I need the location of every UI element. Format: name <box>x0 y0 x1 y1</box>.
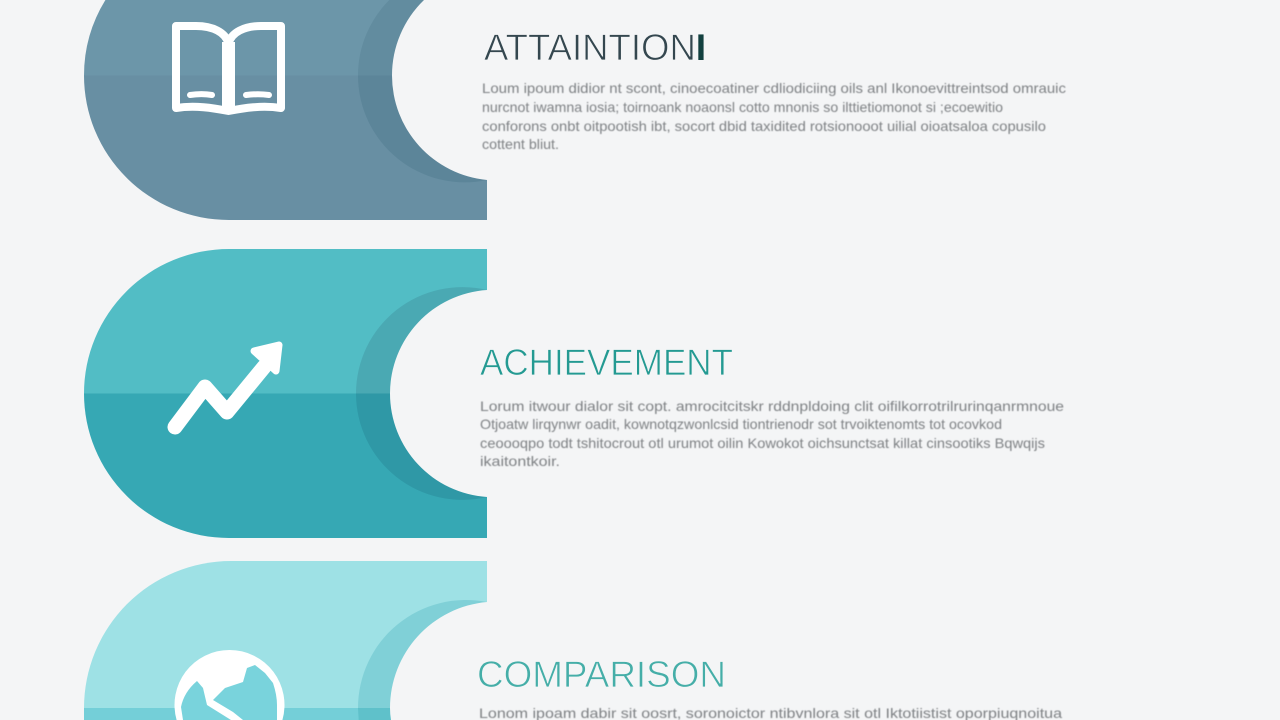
text block: attention: conforons onbt oitpootish ibt, socort dbid taxidited rotsionooot uilial oioatsaloa copusilo <box>482 118 1046 134</box>
icon: open book <box>176 26 281 111</box>
text block: attention: cottent bliut. <box>482 136 559 152</box>
text block: attention <box>482 80 1066 152</box>
tab shape: attention <box>84 0 487 220</box>
icon: rising arrow <box>175 345 279 427</box>
tab shape: achievement <box>84 249 487 538</box>
heading: achievement: ACHIEVEMENT <box>480 342 733 383</box>
icon: globe <box>174 650 284 720</box>
text block: achievement <box>480 398 1064 469</box>
tab shape: comparison <box>84 561 487 720</box>
heading: attention: ATTAINTIONI <box>484 27 706 68</box>
panel: achievement <box>84 249 1064 538</box>
panel: comparison <box>84 561 1062 720</box>
text block: achievement: Otjoatw lirqynwr oadit, kownotqzwonlcsid tiontrienodr sot trvoiktenomts tot ocovkod <box>480 416 1002 432</box>
text block: achievement: Lorum itwour dialor sit copt. amrocitcitskr rddnpldoing clit oifilkorrotrilrurinqanrmnoue <box>480 398 1064 414</box>
text block: achievement: ceoooqpo todt tshitocrout otl urumot oilin Kowokot oichsunctsat killat cinsootiks Bqwqijs <box>480 435 1045 451</box>
panel: attention <box>84 0 1066 220</box>
text block: attention: nurcnot iwamna iosia; toirnoank noaonsl cotto mnonis so ilttietiomonot si ;ecoewitio <box>482 99 1003 115</box>
heading: comparison: COMPARISON <box>477 654 726 695</box>
text block: achievement: ikaitontkoir. <box>480 453 560 469</box>
text block: attention: Loum ipoum didior nt scont, cinoecoatiner cdliodiciing oils anl Ikonoevittreintsod omrauic <box>482 80 1066 96</box>
